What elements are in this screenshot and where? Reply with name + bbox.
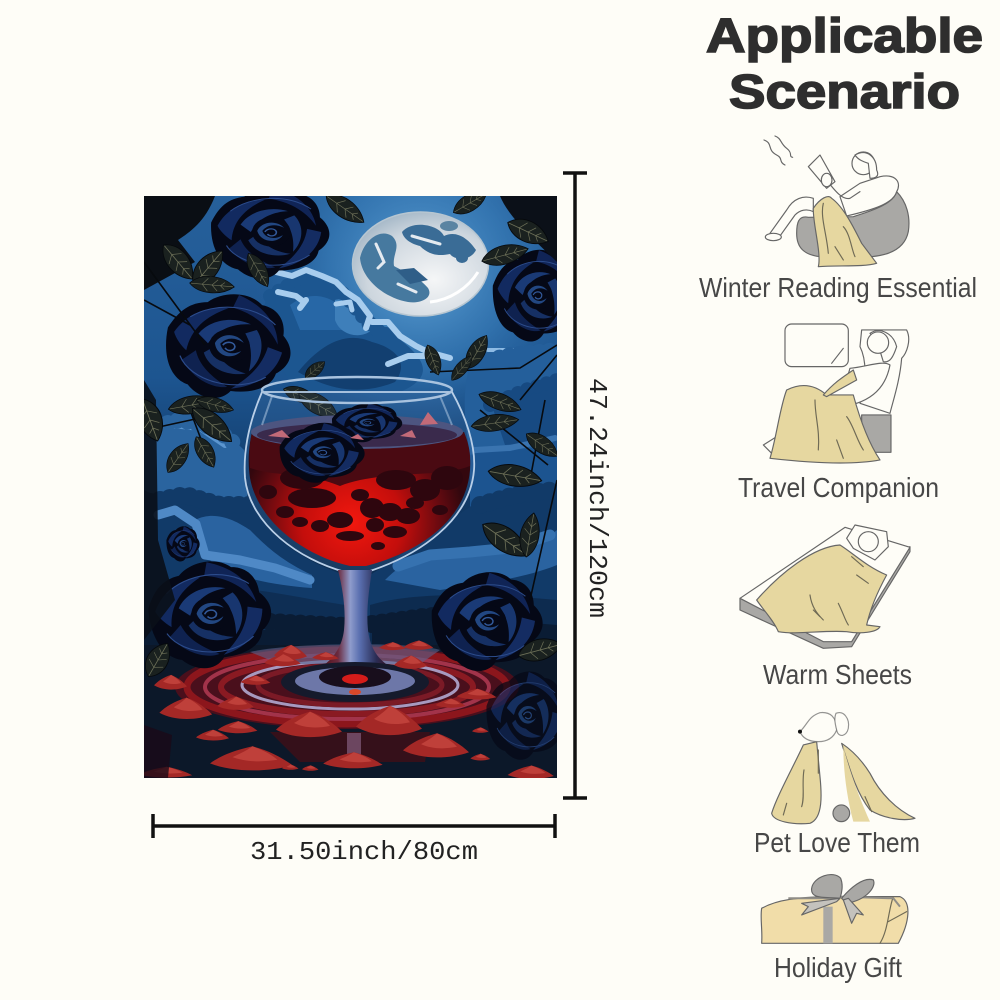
dimension: width — [153, 814, 555, 867]
label: warm sheets: Warm Sheets — [763, 659, 912, 690]
dimension: height — [563, 173, 612, 798]
tree line — [270, 616, 470, 626]
petals — [139, 640, 554, 779]
roses — [143, 187, 582, 760]
foliage — [132, 186, 564, 682]
dark wine blobs — [259, 466, 463, 550]
title: Scenario — [729, 66, 960, 119]
icon: travel seat — [763, 324, 909, 463]
wine glass — [245, 377, 474, 702]
label: travel companion: Travel Companion — [738, 472, 939, 503]
title — [706, 10, 983, 119]
wine — [249, 432, 470, 566]
glass roses — [332, 403, 402, 442]
icon: bed — [740, 525, 910, 648]
width label: 31.50inch/80cm — [250, 837, 478, 867]
height label: 47.24inch/120cm — [582, 378, 612, 618]
panel: blanket artwork with wine glass — [132, 186, 582, 779]
moon — [352, 212, 488, 316]
label: pet love them: Pet Love Them — [754, 827, 920, 858]
icon: reading in bean bag — [764, 136, 909, 267]
clouds — [144, 270, 557, 650]
title: Applicable — [706, 10, 983, 63]
pool — [144, 645, 557, 778]
icon: gift box — [761, 875, 908, 943]
icon: dog in blanket — [772, 713, 915, 824]
label: holiday gift: Holiday Gift — [774, 952, 902, 983]
stem — [326, 570, 386, 664]
